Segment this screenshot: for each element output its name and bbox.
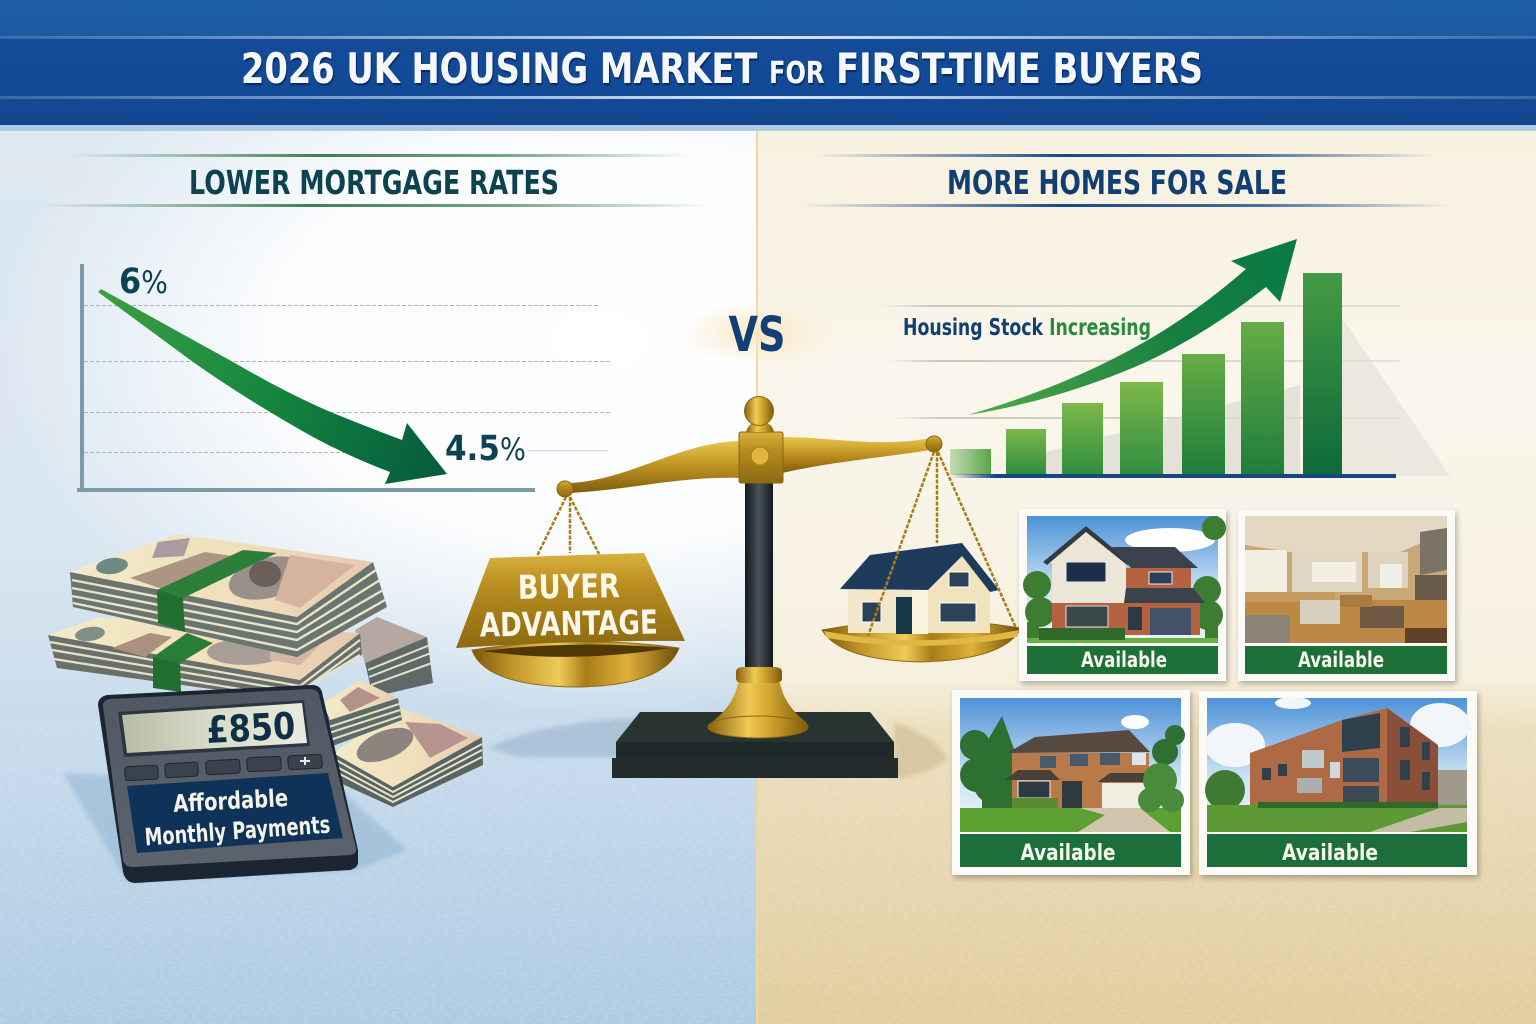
right background panel xyxy=(756,128,1536,1024)
line chart: mortgage rates falling xyxy=(77,262,612,492)
left chains xyxy=(537,497,599,556)
buyer advantage weight: BUYER xyxy=(517,566,620,607)
right chains xyxy=(868,452,1016,636)
stack: top notes xyxy=(70,534,387,657)
vs label xyxy=(679,301,835,365)
bar chart: housing stock increasing xyxy=(880,239,1450,478)
right pan rim xyxy=(824,630,1019,646)
label: 6%: 6% xyxy=(119,262,168,302)
arrow: rate falling xyxy=(98,289,447,484)
calculator xyxy=(63,685,407,883)
left background panel xyxy=(0,128,757,1024)
stack: middle right notes xyxy=(323,680,402,747)
left pan xyxy=(472,641,679,687)
available tag xyxy=(1027,646,1218,674)
heading: lower mortgage rates xyxy=(40,154,710,207)
calculator keys xyxy=(125,754,322,781)
scale base xyxy=(612,712,898,778)
heading: lower mortgage rates: LOWER MORTGAGE RATES xyxy=(189,163,559,202)
calculator display: £850 xyxy=(205,704,296,752)
title banner xyxy=(0,0,1536,131)
heading: more homes for sale: MORE HOMES FOR SALE xyxy=(947,163,1287,202)
available tag: Available xyxy=(1020,841,1116,866)
scale shadow xyxy=(488,718,947,778)
scale stand xyxy=(708,483,808,738)
title: 2026 UK HOUSING MARKET FOR FIRST-TIME BUYERS xyxy=(241,44,1203,93)
buyer advantage weight: ADVANTAGE xyxy=(479,602,658,645)
stack: lower left notes xyxy=(48,617,362,697)
photo card: interior xyxy=(1238,510,1455,681)
label: 4.5%: 4.5% xyxy=(445,429,526,469)
label: housing stock increasing: Housing Stock Increasing xyxy=(903,315,1151,341)
balance scale xyxy=(456,396,1021,778)
buyer advantage weight xyxy=(456,553,685,648)
photo card: brick family home xyxy=(952,690,1190,875)
available tag xyxy=(960,834,1181,867)
photo card: detached house xyxy=(1019,509,1226,681)
house on right pan xyxy=(840,543,999,634)
stack: lower right notes xyxy=(333,708,483,807)
affordable monthly payments label: Monthly Payments xyxy=(144,811,331,851)
available tag: Available xyxy=(1081,648,1167,672)
calculator display xyxy=(118,700,310,757)
available tag xyxy=(1245,646,1447,674)
vs label: VS xyxy=(728,307,786,363)
scale beam xyxy=(557,396,942,497)
money stacks xyxy=(48,534,483,807)
available tag xyxy=(1207,834,1467,867)
calculator body xyxy=(98,685,358,883)
affordable monthly payments label xyxy=(127,773,343,853)
heading: more homes for sale xyxy=(800,154,1450,207)
photo card: apartment block xyxy=(1199,691,1477,875)
affordable monthly payments label: Affordable xyxy=(172,784,289,818)
available tag: Available xyxy=(1298,648,1384,672)
arrow: stock rising xyxy=(968,239,1297,415)
calculator shadow xyxy=(63,773,407,882)
available tag: Available xyxy=(1282,841,1378,866)
stack: back right notes xyxy=(355,617,433,697)
right pan back xyxy=(822,620,1021,662)
